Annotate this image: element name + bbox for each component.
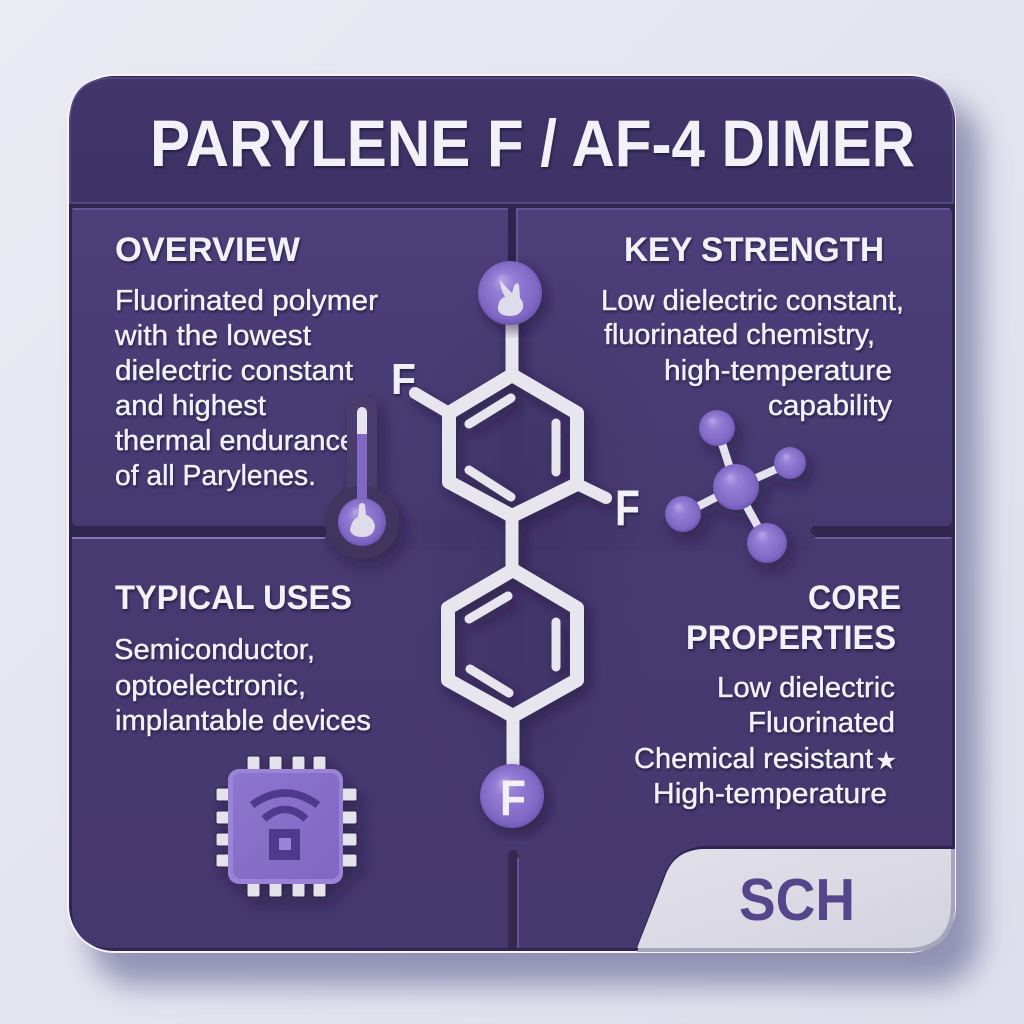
core properties heading: PROPERTIES (686, 619, 896, 657)
chip centre square (269, 829, 300, 860)
centre shading joining the panels (325, 260, 815, 855)
core properties list: High-temperature (653, 778, 887, 810)
wireless arcs (252, 793, 318, 819)
panel: core properties (516, 537, 952, 948)
overview body (114, 285, 379, 492)
core properties list: Chemical resistant (634, 743, 873, 775)
chip body (228, 769, 343, 884)
bottom fluorine atom: F (500, 770, 526, 826)
overview body: dielectric constant (115, 355, 353, 387)
molecule: hexagonal rings and fluorine atoms (391, 261, 640, 828)
bottom fluorine atom (480, 764, 544, 828)
bonds and rings (415, 320, 606, 770)
key strength heading: KEY STRENGTH (624, 231, 884, 269)
typical uses body: optoelectronic, (115, 670, 306, 702)
key strength body: Low dielectric constant, (601, 285, 904, 317)
core properties list: ★ (875, 746, 897, 775)
grooves between panels (71, 208, 952, 948)
core properties list: Fluorinated (748, 707, 895, 739)
icon: ball-and-stick molecule (665, 410, 806, 563)
card shadow (90, 100, 980, 985)
typical uses body: implantable devices (115, 705, 371, 737)
panel: overview (72, 208, 509, 526)
overview body: Fluorinated polymer (115, 285, 379, 317)
core properties list (634, 672, 897, 810)
overview text (114, 231, 379, 492)
icon: thermometer (325, 395, 399, 559)
typical uses heading: TYPICAL USES (115, 579, 352, 617)
title: PARYLENE F / AF-4 DIMER (150, 106, 915, 180)
overview body: with the lowest (114, 320, 311, 352)
overview heading: OVERVIEW (115, 231, 301, 269)
key strength body (601, 285, 904, 422)
panel: typical uses (72, 537, 509, 948)
overview body: and highest (115, 390, 266, 422)
core properties text (634, 579, 901, 810)
key strength body: fluorinated chemistry, (604, 319, 875, 351)
top atom with hand glyph (478, 261, 542, 325)
key strength body: capability (768, 390, 893, 422)
SCH label: SCH (739, 867, 855, 933)
badge: SCH tab (635, 846, 955, 952)
core properties list: Low dielectric (717, 672, 895, 704)
panel: header (70, 78, 953, 203)
fluorine label left: F (391, 355, 416, 404)
key strength text (601, 231, 904, 422)
icon: microchip with wireless symbol (216, 756, 357, 897)
typical uses text (114, 579, 371, 737)
typical uses body (114, 634, 371, 737)
core properties heading: CORE (808, 579, 901, 617)
fluorine label right: F (615, 480, 640, 536)
panel: key strength (516, 208, 952, 526)
typical uses body: Semiconductor, (114, 634, 315, 666)
main card (67, 74, 956, 953)
overview body: of all Parylenes. (115, 460, 316, 492)
chip pins (216, 756, 357, 897)
core properties heading (686, 579, 901, 657)
key strength body: high-temperature (664, 355, 892, 387)
overview body: thermal endurance (115, 425, 356, 457)
